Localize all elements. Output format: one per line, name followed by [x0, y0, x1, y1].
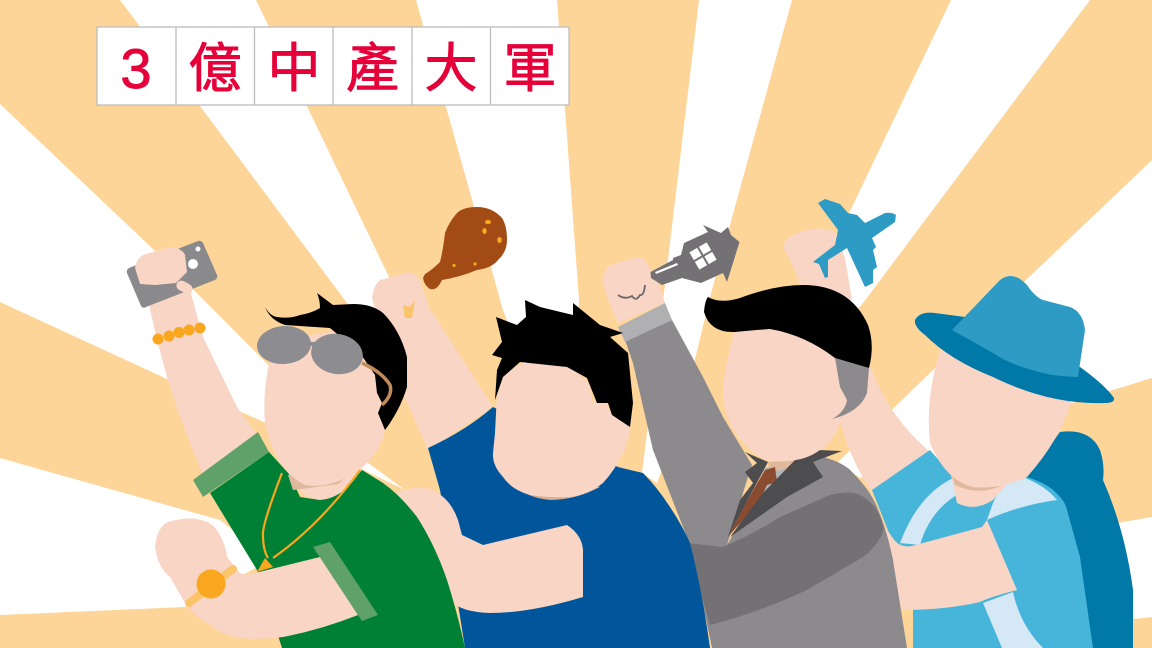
- raised fist: [783, 228, 852, 300]
- title: 3億中產大軍: [97, 27, 569, 105]
- backpack strap: [900, 476, 1057, 545]
- lower sleeve band: [313, 542, 378, 621]
- head: [493, 362, 630, 497]
- key-holding fist: [602, 257, 665, 323]
- sunglasses: [256, 324, 366, 378]
- raised arm: [383, 312, 493, 450]
- backpack: [1027, 431, 1133, 648]
- figure: man in green t-shirt with sunglasses: [127, 241, 465, 648]
- head: [929, 350, 1072, 488]
- tie: [728, 467, 777, 537]
- raised fist: [372, 272, 432, 328]
- title: 3億中產大軍: 中: [268, 40, 320, 98]
- icon: chicken drumstick: [423, 207, 507, 289]
- neck: [950, 470, 1012, 507]
- title: 3億中產大軍: 大: [424, 40, 478, 98]
- neck shadow: [505, 476, 600, 500]
- suit body: [690, 457, 907, 648]
- lower arm and fist: [155, 518, 358, 639]
- raised arm: [148, 290, 258, 475]
- suit sleeve: [625, 320, 752, 545]
- hair: [265, 293, 407, 430]
- raised sleeve band: [193, 432, 269, 497]
- title: 3億中產大軍: 3: [120, 37, 152, 100]
- hugging arm: [397, 488, 583, 613]
- icon: house key: [650, 225, 740, 285]
- title: 3億中產大軍: 億: [188, 40, 242, 98]
- left lapel: [728, 452, 768, 537]
- t-shirt: [428, 407, 710, 648]
- figure: traveller with hat and backpack: [783, 199, 1133, 648]
- sauce stain: [403, 300, 415, 318]
- shirt collar: [755, 460, 795, 495]
- grey side hair: [832, 358, 869, 419]
- title: 3億中產大軍: 軍: [504, 40, 556, 98]
- icon: smartphone: [127, 241, 217, 308]
- hair: [492, 300, 633, 427]
- black hair: [704, 285, 872, 368]
- watch strap: [189, 569, 233, 603]
- hat brim: [915, 313, 1114, 403]
- hat crown: [952, 276, 1085, 377]
- bracelet: [152, 322, 206, 344]
- neck shadow: [950, 470, 1012, 491]
- neck shadow: [288, 475, 345, 490]
- shirt: [872, 450, 1093, 648]
- fist holding phone: [135, 247, 187, 285]
- figure: businessman in grey suit: [602, 225, 907, 648]
- right lapel: [730, 450, 842, 537]
- finger marks: [618, 285, 645, 299]
- neck: [288, 468, 362, 500]
- thumb: [175, 279, 194, 296]
- raised arm: [838, 365, 930, 492]
- necklace: [257, 470, 360, 572]
- figure: man in blue t-shirt: [372, 207, 710, 648]
- sunglasses temple: [362, 363, 391, 405]
- sleeve across chest: [687, 492, 883, 625]
- cuff: [618, 303, 672, 342]
- hugging arm: [880, 520, 1017, 610]
- watch face: [196, 570, 226, 598]
- head: [264, 330, 385, 486]
- icon: airplane: [813, 199, 896, 287]
- t-shirt: [210, 452, 465, 648]
- head: [723, 325, 850, 461]
- title: 3億中產大軍: 產: [346, 40, 399, 98]
- neck shadow: [768, 460, 795, 472]
